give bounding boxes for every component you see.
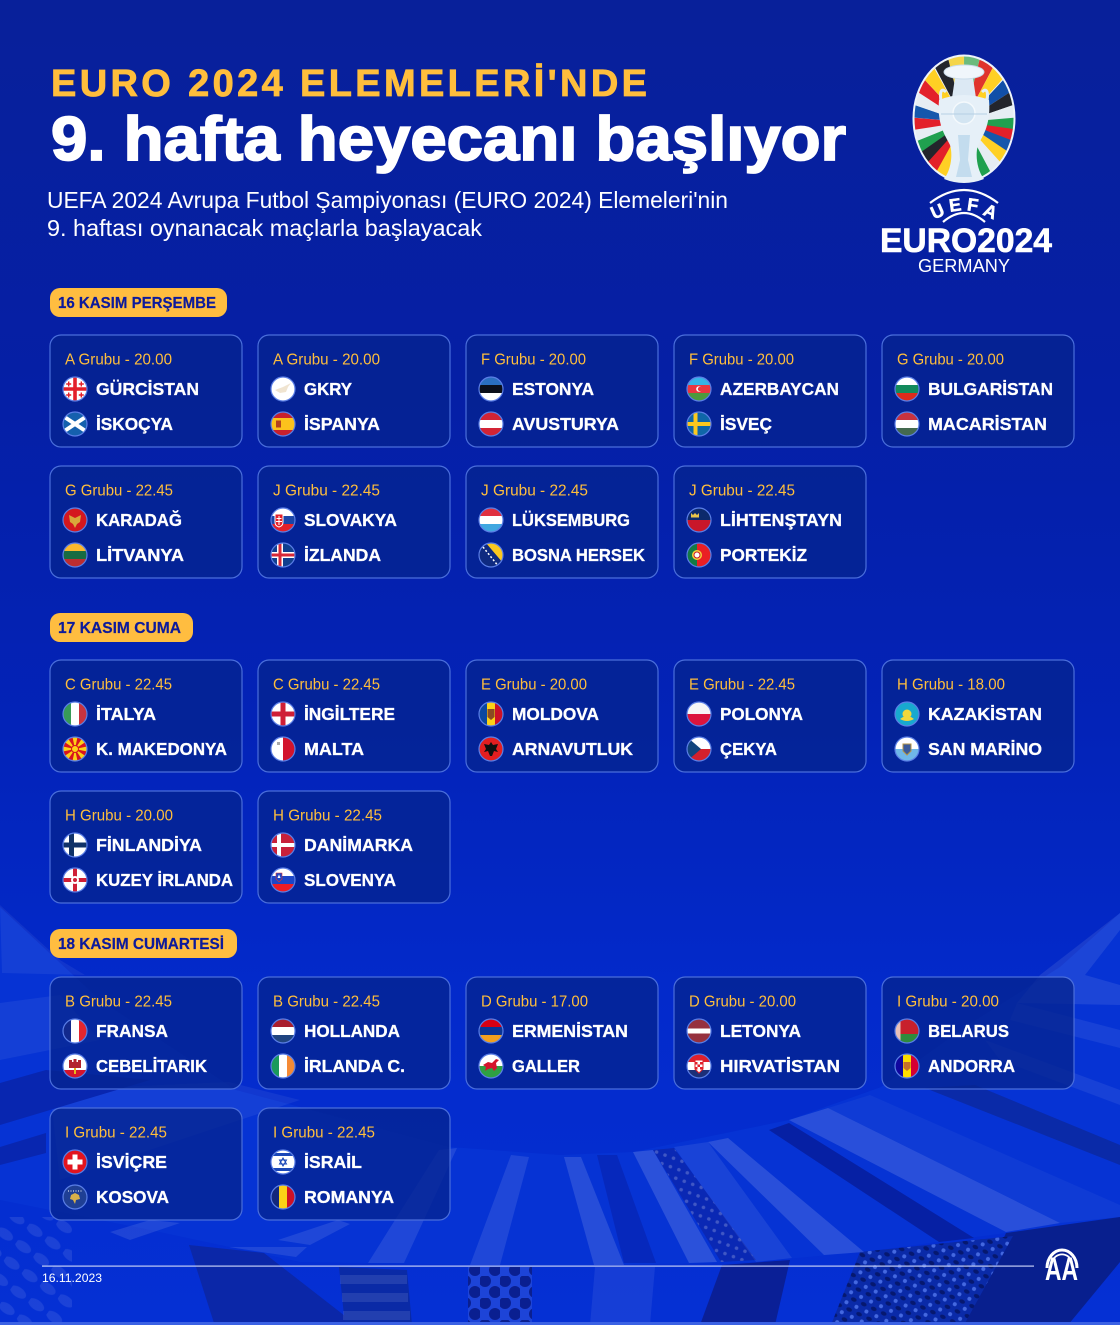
match card: Danimarka - Slovenya: H Grubu - 22.45 bbox=[273, 808, 382, 824]
match card: Karadağ - Litvanya: G Grubu - 22.45 bbox=[65, 482, 173, 500]
date badge: 17 Kasım: 17 KASIM CUMA bbox=[58, 620, 181, 637]
match card: Belarus - Andorra: I Grubu - 20.00 bbox=[897, 994, 999, 1010]
date badge: 16 Kasım: 16 KASIM PERŞEMBE bbox=[58, 295, 216, 312]
match card: Lüksemburg - Bosna Hersek: BOSNA HERSEK bbox=[512, 545, 645, 565]
match card: Gürcistan - İskoçya: GÜRCİSTAN bbox=[96, 379, 199, 399]
match card: Fransa - Cebelitarık: CEBELİTARIK bbox=[96, 1056, 207, 1076]
match card: Lihtenştayn - Portekiz: LİHTENŞTAYN bbox=[720, 510, 842, 530]
match card: Kazakistan - San Marino: SAN MARİNO bbox=[928, 739, 1042, 759]
match card: Estonya - Avusturya: AVUSTURYA bbox=[512, 414, 619, 434]
match card: Ermenistan - Galler bbox=[466, 977, 658, 1089]
match card: Letonya - Hırvatistan bbox=[674, 977, 866, 1089]
match card: Ermenistan - Galler: ERMENİSTAN bbox=[512, 1021, 628, 1041]
match card: Belarus - Andorra bbox=[882, 977, 1074, 1089]
match card: Polonya - Çekya: E Grubu - 22.45 bbox=[689, 676, 795, 694]
logo: UEFA Euro 2024 Germany: U bbox=[928, 200, 948, 223]
match card: İsrail - Romanya: ROMANYA bbox=[304, 1187, 394, 1207]
match card: Finlandiya - Kuzey İrlanda: FİNLANDİYA bbox=[96, 835, 202, 855]
intro text: UEFA 2024 Avrupa Futbol Şampiyonası (EURO 2024) Elemeleri'nin bbox=[47, 187, 728, 213]
match card: İsrail - Romanya bbox=[258, 1108, 450, 1220]
logo: UEFA Euro 2024 Germany bbox=[882, 54, 1052, 272]
match card: Moldova - Arnavutluk: ARNAVUTLUK bbox=[512, 739, 633, 759]
match card: Gürcistan - İskoçya: A Grubu - 20.00 bbox=[65, 352, 172, 368]
match card: Danimarka - Slovenya bbox=[258, 791, 450, 903]
match card: Azerbaycan - İsveç bbox=[674, 335, 866, 447]
match card: Polonya - Çekya: POLONYA bbox=[720, 704, 803, 724]
match card: Karadağ - Litvanya: KARADAĞ bbox=[96, 509, 182, 530]
match card: Estonya - Avusturya bbox=[466, 335, 658, 447]
match card: Hollanda - İrlanda C.: HOLLANDA bbox=[304, 1021, 400, 1041]
intro text: 9. haftası oynanacak maçlarla başlayacak bbox=[47, 215, 482, 241]
match card: Bulgaristan - Macaristan: G Grubu - 20.00 bbox=[897, 352, 1004, 368]
match card: Estonya - Avusturya: F Grubu - 20.00 bbox=[481, 352, 586, 368]
match card: Moldova - Arnavutluk: MOLDOVA bbox=[512, 704, 599, 724]
date badge: 18 Kasım bbox=[50, 929, 237, 958]
match card: İsrail - Romanya: I Grubu - 22.45 bbox=[273, 1124, 375, 1142]
match card: İngiltere - Malta: C Grubu - 22.45 bbox=[273, 676, 380, 694]
match card: Lihtenştayn - Portekiz: J Grubu - 22.45 bbox=[689, 482, 795, 500]
match card: Hollanda - İrlanda C.: B Grubu - 22.45 bbox=[273, 994, 380, 1010]
match card: GKRY - İspanya: İSPANYA bbox=[304, 414, 380, 434]
match card: Ermenistan - Galler: GALLER bbox=[512, 1056, 580, 1076]
match card: Azerbaycan - İsveç: AZERBAYCAN bbox=[720, 379, 839, 399]
logo: UEFA Euro 2024 Germany: EURO2024 bbox=[880, 222, 1052, 260]
match card: İsviçre - Kosova bbox=[50, 1108, 242, 1220]
date badge: 16 Kasım bbox=[50, 288, 227, 317]
logo: UEFA Euro 2024 Germany: F bbox=[966, 194, 980, 216]
match card: Letonya - Hırvatistan: D Grubu - 20.00 bbox=[689, 994, 796, 1010]
match card: Gürcistan - İskoçya: İSKOÇYA bbox=[96, 414, 173, 434]
logo emblem with trophy bbox=[912, 54, 1016, 183]
match card: Slovakya - İzlanda bbox=[258, 466, 450, 578]
match card: Karadağ - Litvanya bbox=[50, 466, 242, 578]
match card: Polonya - Çekya bbox=[674, 660, 866, 772]
match card: Slovakya - İzlanda: J Grubu - 22.45 bbox=[273, 482, 380, 500]
match card: İsrail - Romanya: İSRAİL bbox=[304, 1152, 362, 1172]
match card: Moldova - Arnavutluk: E Grubu - 20.00 bbox=[481, 676, 587, 694]
logo: UEFA Euro 2024 Germany: E bbox=[948, 194, 963, 216]
match card: İtalya - K. Makedonya: İTALYA bbox=[96, 704, 156, 724]
date: 16.11.2023 bbox=[42, 1271, 102, 1285]
match card: Lüksemburg - Bosna Hersek: J Grubu - 22.45 bbox=[481, 482, 588, 500]
match card: Belarus - Andorra: ANDORRA bbox=[928, 1056, 1015, 1076]
match card: Polonya - Çekya: ÇEKYA bbox=[720, 739, 777, 759]
match card: Danimarka - Slovenya: DANİMARKA bbox=[304, 835, 413, 855]
match card: İtalya - K. Makedonya: K. MAKEDONYA bbox=[96, 739, 227, 759]
logo: UEFA Euro 2024 Germany: GERMANY bbox=[918, 256, 1010, 276]
logo: Anadolu Agency: AA bbox=[1045, 1251, 1078, 1287]
match card: Letonya - Hırvatistan: LETONYA bbox=[720, 1021, 801, 1041]
match card: Moldova - Arnavutluk bbox=[466, 660, 658, 772]
match card: Lihtenştayn - Portekiz: PORTEKİZ bbox=[720, 545, 807, 565]
match card: Karadağ - Litvanya: LİTVANYA bbox=[96, 545, 184, 565]
match card: Lüksemburg - Bosna Hersek: LÜKSEMBURG bbox=[512, 510, 630, 530]
match card: Azerbaycan - İsveç: F Grubu - 20.00 bbox=[689, 352, 794, 368]
match card: Finlandiya - Kuzey İrlanda: KUZEY İRLANDA bbox=[96, 870, 233, 890]
date badge: 18 Kasım: 18 KASIM CUMARTESİ bbox=[58, 935, 224, 953]
match card: Lihtenştayn - Portekiz bbox=[674, 466, 866, 578]
match card: Fransa - Cebelitarık bbox=[50, 977, 242, 1089]
match card: Kazakistan - San Marino: KAZAKİSTAN bbox=[928, 704, 1042, 724]
match card: Hollanda - İrlanda C. bbox=[258, 977, 450, 1089]
match card: İsviçre - Kosova: I Grubu - 22.45 bbox=[65, 1124, 167, 1142]
logo: UEFA Euro 2024 Germany: A bbox=[980, 200, 1000, 223]
match card: İsviçre - Kosova: KOSOVA bbox=[96, 1187, 169, 1207]
match card: İsviçre - Kosova: İSVİÇRE bbox=[96, 1152, 167, 1172]
match card: Finlandiya - Kuzey İrlanda: H Grubu - 20.00 bbox=[65, 808, 173, 824]
match card: Bulgaristan - Macaristan: BULGARİSTAN bbox=[928, 379, 1053, 399]
match card: Bulgaristan - Macaristan bbox=[882, 335, 1074, 447]
match card: İtalya - K. Makedonya: C Grubu - 22.45 bbox=[65, 676, 172, 694]
heading: EURO 2024 ELEMELERİ'NDE: EURO 2024 ELEMELERİ'NDE bbox=[51, 63, 647, 105]
title: 9. hafta heyecanı başlıyor bbox=[51, 105, 846, 174]
date badge: 17 Kasım bbox=[50, 613, 193, 642]
match card: GKRY - İspanya: A Grubu - 20.00 bbox=[273, 352, 380, 368]
match card: Kazakistan - San Marino bbox=[882, 660, 1074, 772]
match card: Finlandiya - Kuzey İrlanda bbox=[50, 791, 242, 903]
match card: GKRY - İspanya bbox=[258, 335, 450, 447]
match card: Fransa - Cebelitarık: B Grubu - 22.45 bbox=[65, 994, 172, 1010]
match card: Belarus - Andorra: BELARUS bbox=[928, 1021, 1009, 1041]
match card: Azerbaycan - İsveç: İSVEÇ bbox=[720, 414, 772, 434]
match card: Ermenistan - Galler: D Grubu - 17.00 bbox=[481, 994, 588, 1010]
match card: İtalya - K. Makedonya bbox=[50, 660, 242, 772]
match card: İngiltere - Malta: İNGİLTERE bbox=[304, 704, 395, 724]
match card: Lüksemburg - Bosna Hersek bbox=[466, 466, 658, 578]
match card: Estonya - Avusturya: ESTONYA bbox=[512, 379, 594, 399]
match card: Slovakya - İzlanda: İZLANDA bbox=[304, 545, 381, 565]
match card: Danimarka - Slovenya: SLOVENYA bbox=[304, 870, 396, 890]
footer line bbox=[42, 1266, 1034, 1267]
match card: İngiltere - Malta: MALTA bbox=[304, 739, 364, 759]
match card: Hollanda - İrlanda C.: İRLANDA C. bbox=[304, 1056, 405, 1076]
match card: Bulgaristan - Macaristan: MACARİSTAN bbox=[928, 414, 1047, 434]
match card: İngiltere - Malta bbox=[258, 660, 450, 772]
intro text bbox=[47, 187, 728, 241]
match card: Fransa - Cebelitarık: FRANSA bbox=[96, 1021, 168, 1041]
match card: Gürcistan - İskoçya bbox=[50, 335, 242, 447]
match card: Letonya - Hırvatistan: HIRVATİSTAN bbox=[720, 1056, 840, 1076]
match card: GKRY - İspanya: GKRY bbox=[304, 379, 352, 399]
match card: Kazakistan - San Marino: H Grubu - 18.00 bbox=[897, 676, 1005, 694]
match card: Slovakya - İzlanda: SLOVAKYA bbox=[304, 510, 397, 530]
